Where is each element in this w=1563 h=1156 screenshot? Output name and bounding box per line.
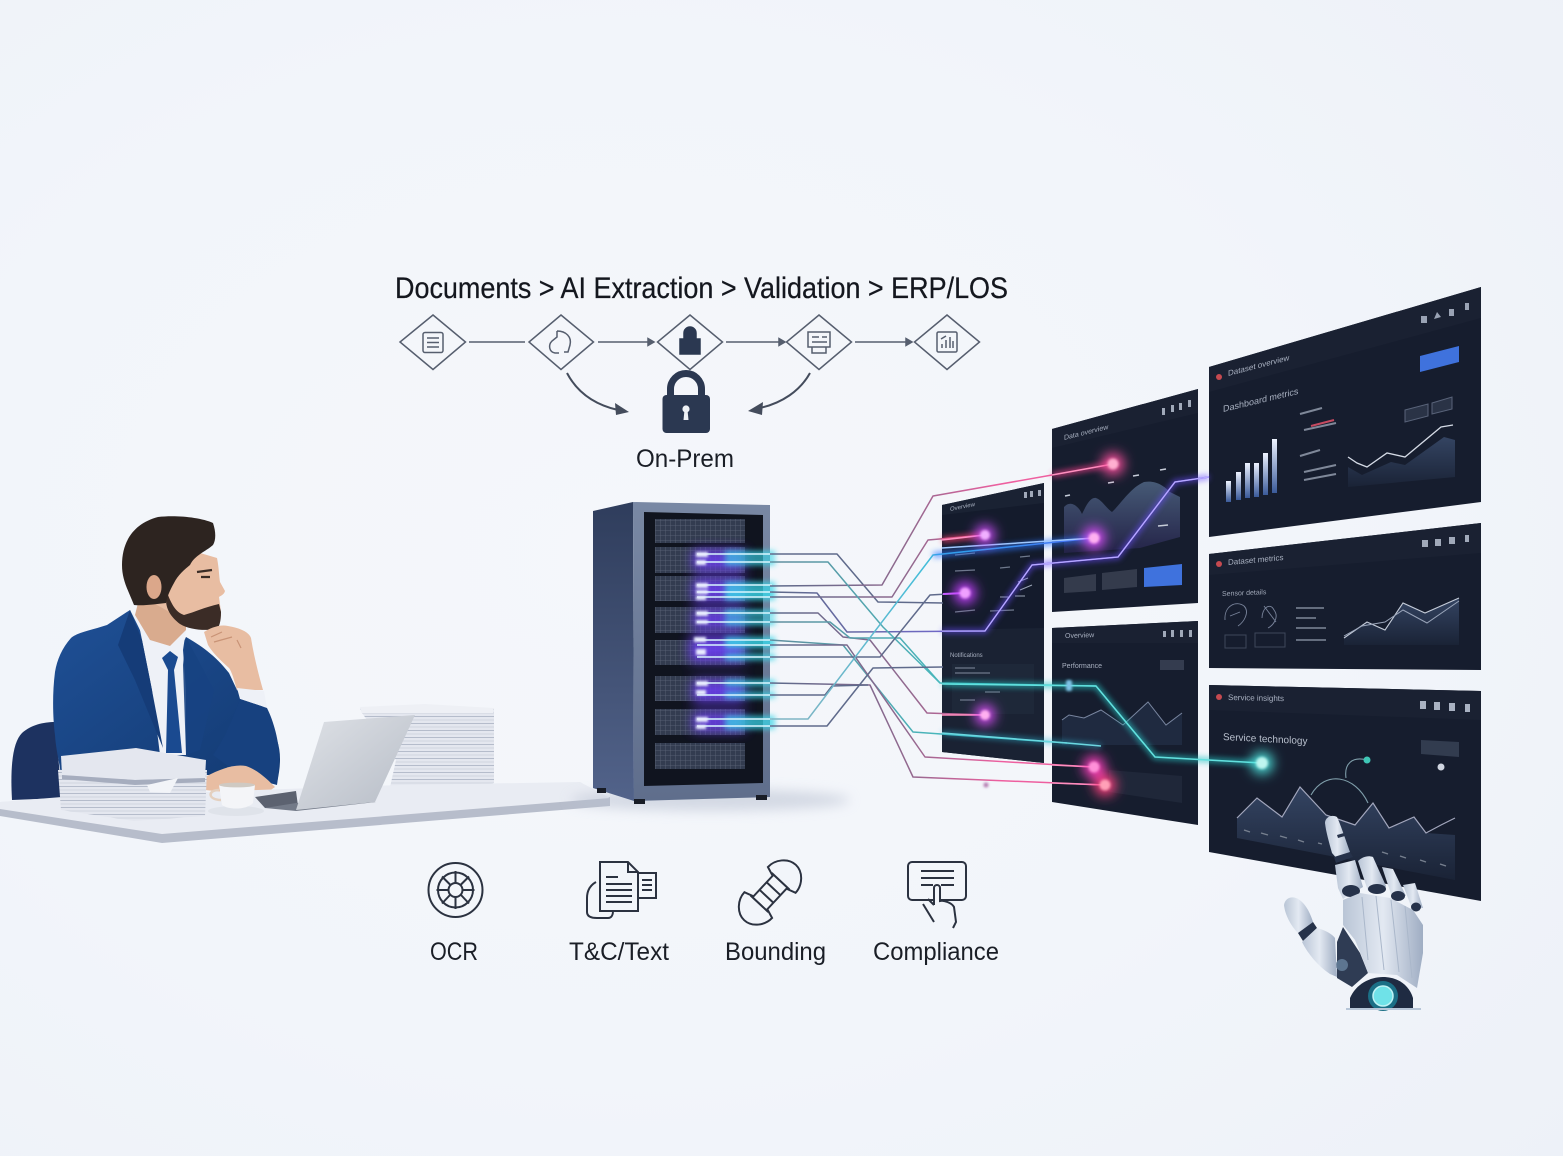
beard: [166, 590, 221, 630]
panel: top right dashboard: [1209, 287, 1481, 537]
bright light cores: [697, 554, 772, 726]
line: lower pink: [770, 683, 1105, 785]
label: Bounding: Bounding: [725, 938, 826, 966]
stat boxes: [1225, 633, 1285, 648]
connector lines: server to dashboards: [770, 475, 1209, 785]
bright pink core: [942, 464, 1113, 785]
arrow: form to on-prem: [748, 373, 810, 415]
line: teal to centre: [770, 622, 940, 683]
lower section bg: [942, 628, 1044, 763]
suit jacket: [53, 610, 280, 783]
wrist light ring: [1373, 986, 1393, 1006]
line: merge link: [770, 685, 868, 695]
section title: Dashboard metrics: [1223, 386, 1299, 414]
index lower segment: [1335, 860, 1363, 899]
icon: OCR wheel: [428, 863, 482, 917]
teal marker: [1364, 756, 1370, 764]
desk: [0, 782, 610, 843]
base plate: [1346, 1008, 1421, 1010]
mechanical wrist joint: [1337, 927, 1368, 987]
header title: Data overview: [1064, 423, 1109, 442]
person at desk: [0, 516, 610, 843]
hand at chin: [204, 625, 263, 690]
line chart: [1237, 787, 1455, 833]
mini labels: [1300, 408, 1336, 480]
eye and brow: [197, 570, 212, 577]
step: AI extraction diamond: [529, 315, 594, 370]
teal bright core: [942, 684, 1262, 763]
hair: [122, 516, 215, 605]
line: magenta to centre bottom: [770, 645, 1094, 767]
label: On-Prem: On-Prem: [636, 445, 734, 473]
ring finger: [1382, 867, 1406, 896]
label: Compliance: Compliance: [873, 938, 999, 966]
line: pink to lower left panel: [770, 613, 985, 715]
arrow: form to ERP: [855, 338, 912, 346]
front paper stack: [58, 748, 207, 821]
line: teal to centre bottom: [770, 640, 1067, 743]
laptop: [255, 715, 415, 811]
header bar: [942, 483, 1044, 515]
LED clusters: [694, 552, 708, 729]
label: T&C/Text: T&C/Text: [569, 938, 669, 966]
thumb base: [1302, 928, 1337, 977]
line charts: [1344, 598, 1459, 638]
bright violet core: [942, 477, 1209, 631]
face: [146, 550, 225, 629]
header title: Dataset overview: [1228, 353, 1289, 378]
neck: [135, 595, 186, 646]
step: form diamond: [786, 315, 852, 370]
panel: bottom right dashboard: [1209, 685, 1481, 901]
wrist dome: [1350, 977, 1413, 1008]
button: [1421, 740, 1459, 757]
line: slate to magenta node: [770, 593, 965, 657]
thumb joint: [1298, 922, 1317, 941]
pipeline flow diagram: [400, 315, 980, 370]
section title: Performance: [1062, 663, 1102, 670]
panel: centre top dashboard: [1052, 389, 1198, 612]
line chart: [1348, 425, 1453, 467]
header icons: [1216, 303, 1469, 380]
step: documents diamond: [400, 315, 466, 370]
rack side: [593, 502, 634, 801]
icon: T&C document: [587, 862, 656, 918]
index tip: [1325, 816, 1350, 860]
panel: centre bottom dashboard: [1052, 621, 1198, 825]
connector line: [469, 341, 525, 343]
glowing nodes: [954, 453, 1273, 796]
joint disc: [1336, 959, 1348, 971]
header icons: [1024, 490, 1041, 498]
text rows: [955, 553, 1030, 700]
header bar: [1052, 621, 1198, 643]
pink glow left: [942, 535, 985, 540]
wrist light halo: [1368, 981, 1398, 1011]
line: slate to left lower: [770, 667, 943, 726]
glowing line segments on panels: [933, 464, 1262, 785]
area chart: [1064, 482, 1180, 553]
pink glow top: [1052, 464, 1113, 475]
annotation arcs: [1311, 759, 1368, 803]
robot hand: [1284, 816, 1423, 1011]
arrow: extraction to validation: [598, 338, 654, 346]
bar chart: [1226, 439, 1277, 502]
icon: bounding tool: [730, 852, 810, 933]
tie: [162, 651, 182, 753]
line: purple to top right panel: [770, 477, 1209, 632]
teal lower core: [942, 733, 1101, 746]
gauges: [1405, 397, 1452, 422]
header title: Overview: [950, 502, 976, 513]
header title: Overview: [1065, 632, 1095, 640]
arrow: extraction to on-prem: [567, 373, 629, 415]
header icons: [1216, 694, 1470, 712]
blue button: [1420, 346, 1459, 372]
header bar: [1209, 287, 1481, 392]
magenta segment: [943, 593, 965, 594]
blue glow centre: [933, 538, 1094, 555]
step: validation lock diamond: [658, 315, 722, 370]
section title: Sensor details: [1222, 589, 1267, 598]
cyan light beams: [725, 554, 775, 726]
lapel right: [183, 637, 214, 755]
area chart: [1344, 598, 1459, 645]
line: slate to left panel: [770, 554, 943, 603]
teal glow: [942, 684, 1262, 763]
icon: padlock: [662, 373, 710, 433]
chair: [11, 722, 62, 800]
rack inner: [644, 512, 763, 786]
lower band: [1109, 770, 1182, 803]
node cores: [960, 458, 1268, 790]
small labels: [1065, 469, 1168, 526]
shirt: [132, 612, 186, 755]
hand on laptop: [205, 765, 275, 796]
header icons: [1163, 630, 1192, 637]
palm: [1343, 893, 1423, 988]
area chart: [1348, 437, 1455, 487]
teal lower glow: [942, 733, 1101, 746]
shirt cuff: [237, 688, 267, 708]
header icons: [1162, 400, 1191, 415]
bright blue core: [942, 538, 1094, 548]
button: [1160, 660, 1184, 670]
violet glow centre: [942, 477, 1209, 631]
arrow: validation to form: [726, 338, 785, 346]
buttons: [1064, 564, 1182, 593]
line: pink to left panel: [770, 535, 985, 597]
pinky finger: [1403, 883, 1423, 908]
thumb tip: [1284, 897, 1313, 933]
header title: Service insights: [1228, 693, 1284, 703]
scatter marks: [1000, 578, 1032, 597]
palm ridges: [1362, 896, 1412, 978]
axis ticks: [1244, 830, 1446, 866]
rack frame: [633, 502, 770, 801]
middle finger: [1358, 856, 1386, 893]
list rows: [1296, 608, 1326, 640]
lower title: Notifications: [950, 653, 983, 659]
panel: middle right dashboard: [1209, 523, 1481, 670]
finger joints: [1334, 833, 1421, 912]
header bar: [1209, 523, 1481, 575]
coffee cup and saucer: [208, 783, 264, 816]
header title: Dataset metrics: [1228, 553, 1283, 567]
server units: [655, 519, 745, 769]
panel: left dashboard: [942, 483, 1044, 763]
purple glows: [690, 550, 745, 731]
small marker: [1438, 764, 1444, 770]
lower table: [952, 664, 1034, 714]
title: pipeline steps: Documents > AI Extraction > Validation > ERP/LOS: [395, 272, 1008, 305]
icon: compliance touch: [908, 862, 966, 928]
back paper stack: [360, 704, 494, 797]
feet: [597, 788, 767, 804]
feature icons: [428, 852, 966, 933]
floor shadow under server: [570, 789, 850, 811]
header bar: [1052, 389, 1198, 448]
line: teal main: [770, 562, 1096, 686]
forearm: [213, 699, 279, 785]
header bar: [1209, 685, 1481, 720]
line: teal to blue: [770, 538, 1094, 719]
step: ERP chart diamond: [914, 315, 980, 370]
label: OCR: OCR: [430, 938, 478, 966]
header icons: [1216, 535, 1469, 567]
scribble gauges: [1225, 604, 1276, 628]
ear: [146, 575, 162, 599]
line: pink to centre top panel: [770, 475, 1052, 586]
server rack: [593, 502, 775, 804]
lapel left: [118, 610, 163, 748]
section title: Service technology: [1223, 732, 1307, 747]
node halos: [954, 453, 1273, 796]
line chart: [1062, 702, 1182, 745]
area chart: [1237, 787, 1455, 880]
